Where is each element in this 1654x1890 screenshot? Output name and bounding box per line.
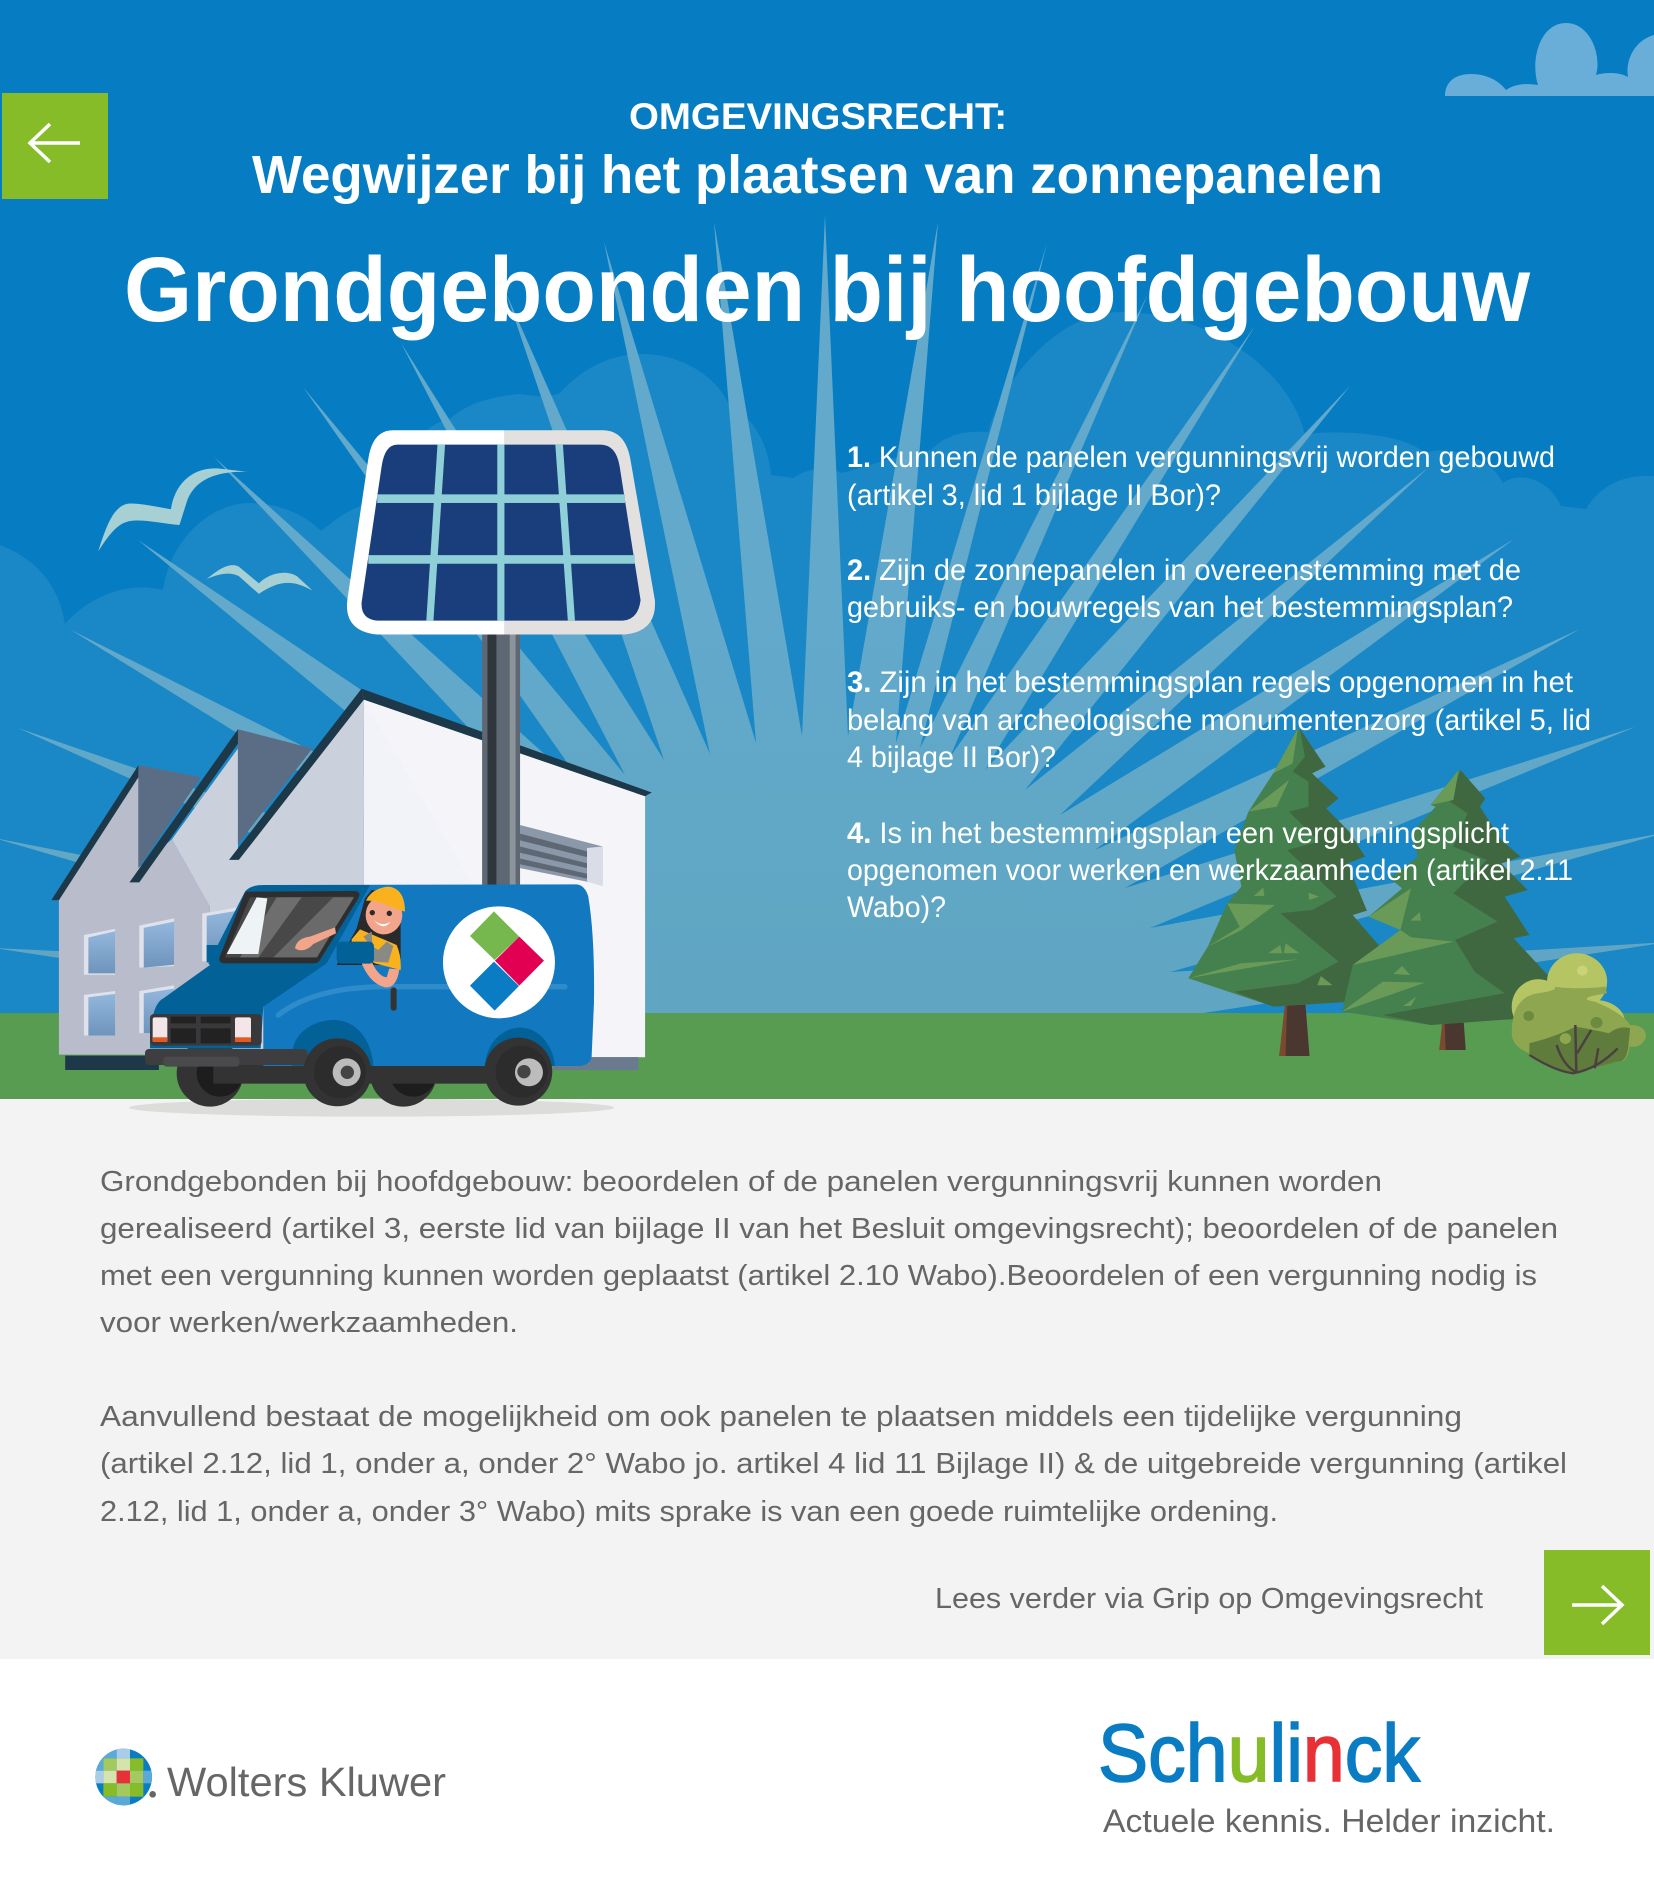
van shadow [129,1099,614,1117]
text block: questions: (artikel 3, lid 1 bijlage II Bor)? [847,479,1221,512]
grille and lights [150,1014,262,1046]
text block: questions: 4 bijlage II Bor)? [847,741,1056,774]
text block: questions: belang van archeologische monumentenzorg (artikel 5, lid [847,704,1591,737]
panel cells [362,445,641,621]
button: back arrow [2,93,108,199]
panel: sky background [0,0,1654,1015]
text block: questions: 3. Zijn in het bestemmingsplan regels opgenomen in het [847,666,1574,699]
tree left [1188,728,1383,1056]
illustration: van [129,884,614,1117]
pole [482,631,520,890]
illustration: trees [1188,728,1646,1073]
panel: light text area [0,1099,1654,1659]
bumper [145,1049,308,1067]
text block: explanation: Aanvullend bestaat de mogelijkheid om ook panelen te plaatsen middels een tijdelijke vergunning [100,1401,1462,1433]
wheel arches [292,1020,555,1066]
illustration: building [51,689,652,1070]
front wheel [303,1038,371,1106]
text block: explanation: voor werken/werkzaamheden. [100,1307,518,1339]
body highlight [278,987,565,1015]
text block: explanation: (artikel 2.12, lid 1, onder a, onder 2° Wabo jo. artikel 4 lid 11 Bijlage II) & de uitgebreide vergunning (artikel [100,1448,1567,1480]
tree right [1342,770,1552,1050]
panel frame [347,430,504,635]
sun rays [0,215,1654,1015]
heading: main title: Grondgebonden bij hoofdgebouw [124,239,1530,341]
text block: questions: opgenomen voor werken en werkzaamheden (artikel 2.11 [847,854,1573,887]
panel: white footer [0,1659,1654,1890]
heading: subtitle: Wegwijzer bij het plaatsen van zonnepanelen [252,145,1383,205]
cloud: top right [1445,23,1654,96]
text block: questions: 1. Kunnen de panelen vergunningsvrij worden gebouwd [847,441,1555,474]
underbody [213,1065,490,1084]
text block: questions: 2. Zijn de zonnepanelen in overeenstemming met de [847,554,1521,587]
text block: explanation: gerealiseerd (artikel 3, eerste lid van bijlage II van het Besluit omgevingsrecht); beoordelen of de panelen [100,1213,1558,1245]
grass strip [0,1013,1654,1100]
driver [337,887,405,987]
windshield [219,891,359,963]
logo: Wolters Kluwer [93,1747,446,1808]
text block: explanation: 2.12, lid 1, onder a, onder 3° Wabo) mits sprake is van een goede ruimtelijke ordening. [100,1496,1278,1528]
logo: Schulinck: Schulinck [1098,1708,1421,1799]
far wheels [177,1040,437,1107]
text block: explanation [100,1166,1567,1528]
logo circle on van [443,906,555,1018]
link text: Lees verder via Grip op Omgevingsrecht [935,1583,1483,1615]
panel grid [368,445,635,621]
clouds behind the rays [0,312,1654,1015]
door mirror [337,942,374,964]
button: forward arrow [1544,1550,1650,1655]
van mirror left [207,945,223,962]
rear wheel [484,1038,552,1106]
windows [84,906,243,1036]
text block: questions: Wabo)? [847,891,946,924]
bush [1512,953,1646,1073]
text block: explanation: met een vergunning kunnen worden geplaatst (artikel 2.10 Wabo).Beoordelen of een vergunning nodig is [100,1260,1537,1292]
text block: questions [847,441,1591,924]
text block: explanation: Grondgebonden bij hoofdgebouw: beoordelen of de panelen vergunningsvrij kunnen worden [100,1166,1382,1198]
van body [263,884,594,1066]
vent [520,825,603,886]
door handle [391,987,397,1011]
text block: questions: gebruiks- en bouwregels van het bestemmingsplan? [847,591,1513,624]
van cab and hood [150,885,370,1048]
text block: questions: 4. Is in het bestemmingsplan een vergunningsplicht [847,817,1510,850]
illustration: solar panel on pole [347,430,655,890]
heading: kicker: OMGEVINGSRECHT: [629,96,1007,137]
illustration: birds [98,468,312,594]
globe icon [95,1748,156,1806]
tagline: Actuele kennis. Helder inzicht. [1103,1803,1555,1839]
wordmark: Wolters Kluwer [167,1759,446,1805]
